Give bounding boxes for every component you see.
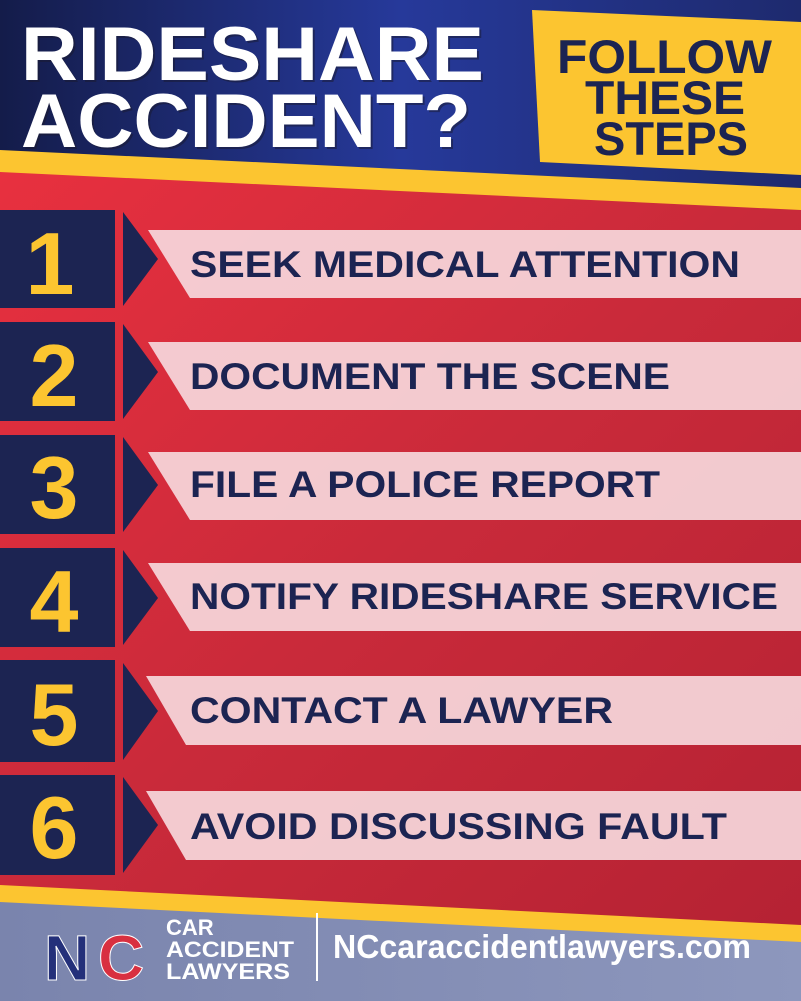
step 6 (0, 775, 801, 877)
title: RIDESHARE (21, 12, 484, 97)
title: ACCIDENT? (21, 79, 471, 164)
callout: follow these steps: FOLLOW (557, 30, 773, 83)
callout: follow these steps: THESE (585, 71, 745, 124)
footer background (0, 900, 801, 1001)
divider (316, 913, 318, 981)
callout: follow these steps (532, 10, 801, 175)
title: RIDESHARE (23, 14, 486, 99)
step 3: FILE A POLICE REPORT (190, 464, 660, 505)
step 2: DOCUMENT THE SCENE (190, 356, 670, 397)
logo (44, 915, 295, 994)
step 4 (0, 548, 801, 651)
step 1: 1 (26, 214, 74, 313)
step 2 (0, 322, 801, 425)
step 5: 5 (30, 665, 78, 764)
step 1 (0, 210, 801, 313)
yellow band top (0, 150, 801, 210)
logo: N (44, 922, 90, 994)
step 4: NOTIFY RIDESHARE SERVICE (190, 576, 778, 617)
yellow band footer (0, 885, 801, 942)
logo: ACCIDENT (166, 937, 295, 962)
step 2: 2 (30, 326, 78, 425)
red body background (0, 170, 801, 940)
logo: C (98, 922, 144, 994)
logo: LAWYERS (166, 959, 290, 984)
step 5 (0, 660, 801, 764)
step 3 (0, 435, 801, 537)
step 5: CONTACT A LAWYER (190, 690, 613, 731)
header background (0, 0, 801, 200)
title (21, 12, 486, 166)
step 4: 4 (30, 552, 79, 651)
step 6: 6 (30, 778, 78, 877)
callout: follow these steps: STEPS (594, 112, 748, 165)
logo: CAR (166, 915, 214, 940)
website url: NCcaraccidentlawyers.com (333, 928, 751, 965)
step 6: AVOID DISCUSSING FAULT (190, 806, 727, 847)
step 3: 3 (30, 438, 78, 537)
title: ACCIDENT? (23, 81, 473, 166)
step 1: SEEK MEDICAL ATTENTION (190, 244, 740, 285)
